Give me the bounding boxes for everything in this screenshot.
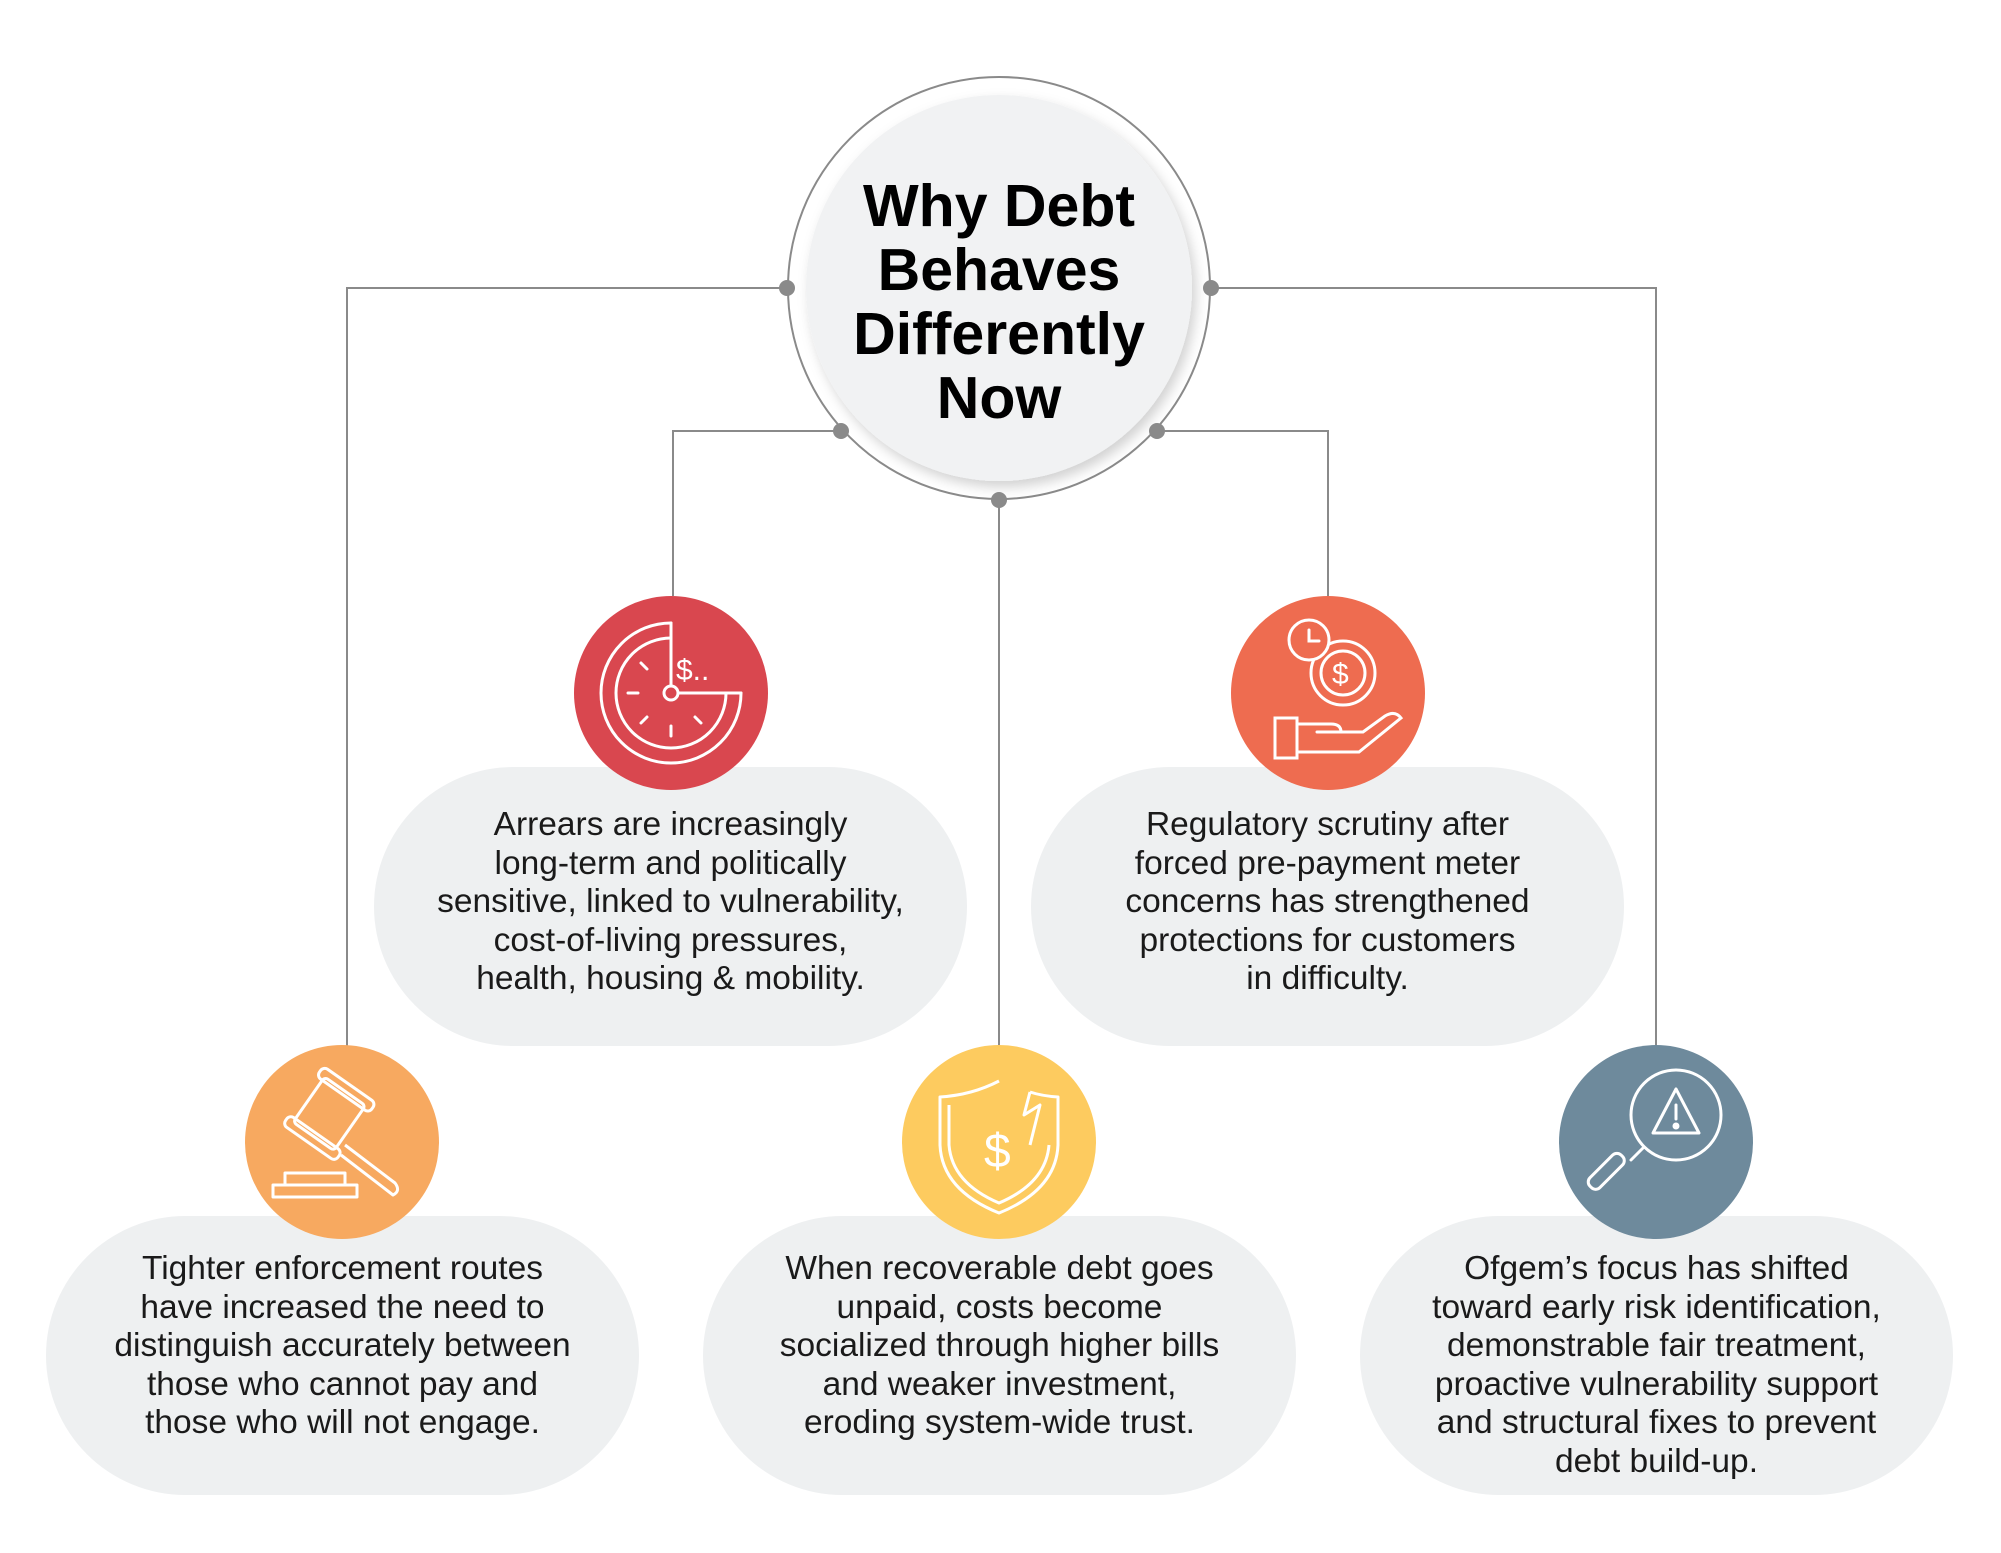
title: Now [937, 365, 1061, 431]
title [853, 173, 1145, 431]
panel: regulatory scrutiny: in difficulty. [1246, 960, 1409, 997]
panel: regulatory scrutiny: forced pre-payment meter [1135, 845, 1520, 882]
icon: hand with coin and clock: $ [1332, 658, 1349, 691]
panel: enforcement: have increased the need to [140, 1289, 545, 1326]
panel: socialized costs: unpaid, costs become [837, 1289, 1162, 1326]
icon: clock with dollar: $.. [676, 654, 709, 687]
panel: socialized costs [703, 1216, 1296, 1495]
icon: broken shield with dollar: $ [984, 1125, 1011, 1178]
title: Differently [853, 301, 1145, 367]
panel: Ofgem focus [1360, 1216, 1953, 1495]
panel: Ofgem focus: toward early risk identification, [1432, 1288, 1881, 1326]
panel: regulatory scrutiny: concerns has strengthened [1125, 883, 1530, 920]
panel: socialized costs: and weaker investment, [823, 1366, 1176, 1403]
panel: arrears: Arrears are increasingly [494, 806, 847, 843]
panel: regulatory scrutiny [1031, 767, 1624, 1046]
central title circle [779, 76, 1219, 508]
icon: broken shield with dollar [902, 1045, 1096, 1239]
panel: arrears: health, housing & mobility. [476, 960, 865, 997]
panel: Ofgem focus: Ofgem’s focus has shifted [1464, 1250, 1849, 1287]
panel: Ofgem focus: proactive vulnerability support [1435, 1366, 1878, 1402]
panel: Ofgem focus: debt build-up. [1555, 1442, 1758, 1480]
panel: arrears: cost-of-living pressures, [494, 922, 847, 959]
panel: enforcement [46, 1216, 639, 1495]
panel: enforcement: Tighter enforcement routes [142, 1250, 543, 1287]
title: Behaves [878, 237, 1120, 303]
icon: magnifier with warning [1559, 1045, 1753, 1239]
panel: arrears: sensitive, linked to vulnerability, [437, 883, 904, 920]
panel: enforcement: those who will not engage. [145, 1404, 540, 1441]
panel: arrears [374, 767, 967, 1046]
panel: regulatory scrutiny: protections for customers [1139, 922, 1516, 959]
panel: socialized costs: socialized through higher bills [780, 1327, 1219, 1364]
icon: clock with dollar [574, 596, 768, 790]
panel: socialized costs: When recoverable debt goes [785, 1250, 1214, 1287]
icon: hand with coin and clock [1231, 596, 1425, 790]
title: Why Debt [863, 173, 1135, 239]
panel: Ofgem focus: demonstrable fair treatment, [1447, 1327, 1866, 1364]
panel: regulatory scrutiny: Regulatory scrutiny after [1146, 806, 1509, 843]
panel: arrears: long-term and politically [495, 845, 846, 882]
panel: enforcement: distinguish accurately between [114, 1327, 571, 1364]
panel: Ofgem focus: and structural fixes to prevent [1437, 1404, 1876, 1441]
icon: gavel [245, 1045, 439, 1239]
panel: socialized costs: eroding system-wide trust. [804, 1404, 1195, 1441]
panel: enforcement: those who cannot pay and [147, 1366, 538, 1403]
